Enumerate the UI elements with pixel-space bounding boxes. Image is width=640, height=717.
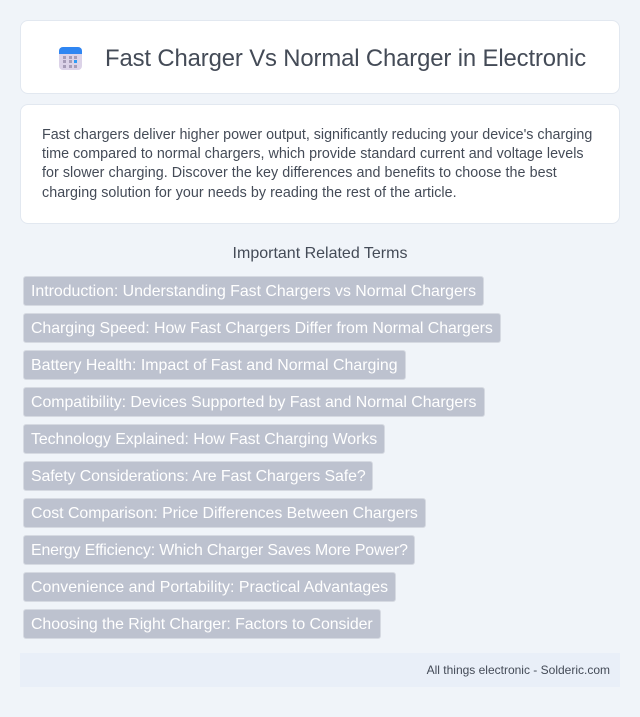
term 7 [23,498,426,528]
panel: intro text [20,104,620,224]
text block: intro: charging solution for your needs by reading the rest of the article. [42,185,457,201]
term 9 [23,572,396,602]
term 6: Safety Considerations: Are Fast Chargers Safe? [31,468,366,485]
text block: intro: time compared to normal chargers, which provide standard current and voltage levels [42,146,584,162]
term 4: Compatibility: Devices Supported by Fast and Normal Chargers [31,394,476,411]
term 8 [23,535,415,565]
icon: calendar [59,47,82,70]
title: Fast Charger Vs Normal Charger in Electronic [105,45,586,72]
term 6 [23,461,373,491]
panel: title card [20,20,620,94]
term 1 [23,276,484,306]
term 5 [23,424,385,454]
footer text: All things electronic - Solderic.com [427,663,610,677]
term 9: Convenience and Portability: Practical Advantages [31,579,388,596]
text block: intro [42,127,592,201]
term 3 [23,350,406,380]
term 1: Introduction: Understanding Fast Chargers vs Normal Chargers [31,283,476,300]
term 3: Battery Health: Impact of Fast and Normal Charging [31,357,398,374]
term 8: Energy Efficiency: Which Charger Saves More Power? [31,542,408,559]
term 2: Charging Speed: How Fast Chargers Differ from Normal Chargers [31,320,493,337]
footer [20,653,620,687]
list: related terms [23,276,501,639]
term 4 [23,387,485,417]
text block: intro: Fast chargers deliver higher power output, significantly reducing your device's charging [42,127,592,143]
heading: related terms: Important Related Terms [233,245,407,262]
term 5: Technology Explained: How Fast Charging Works [31,431,377,448]
term 10 [23,609,381,639]
term 7: Cost Comparison: Price Differences Between Chargers [31,505,418,522]
term 2 [23,313,501,343]
text block: intro: for slower charging. Discover the key differences and benefits to choose the best [42,165,557,181]
term 10: Choosing the Right Charger: Factors to Consider [31,616,373,633]
